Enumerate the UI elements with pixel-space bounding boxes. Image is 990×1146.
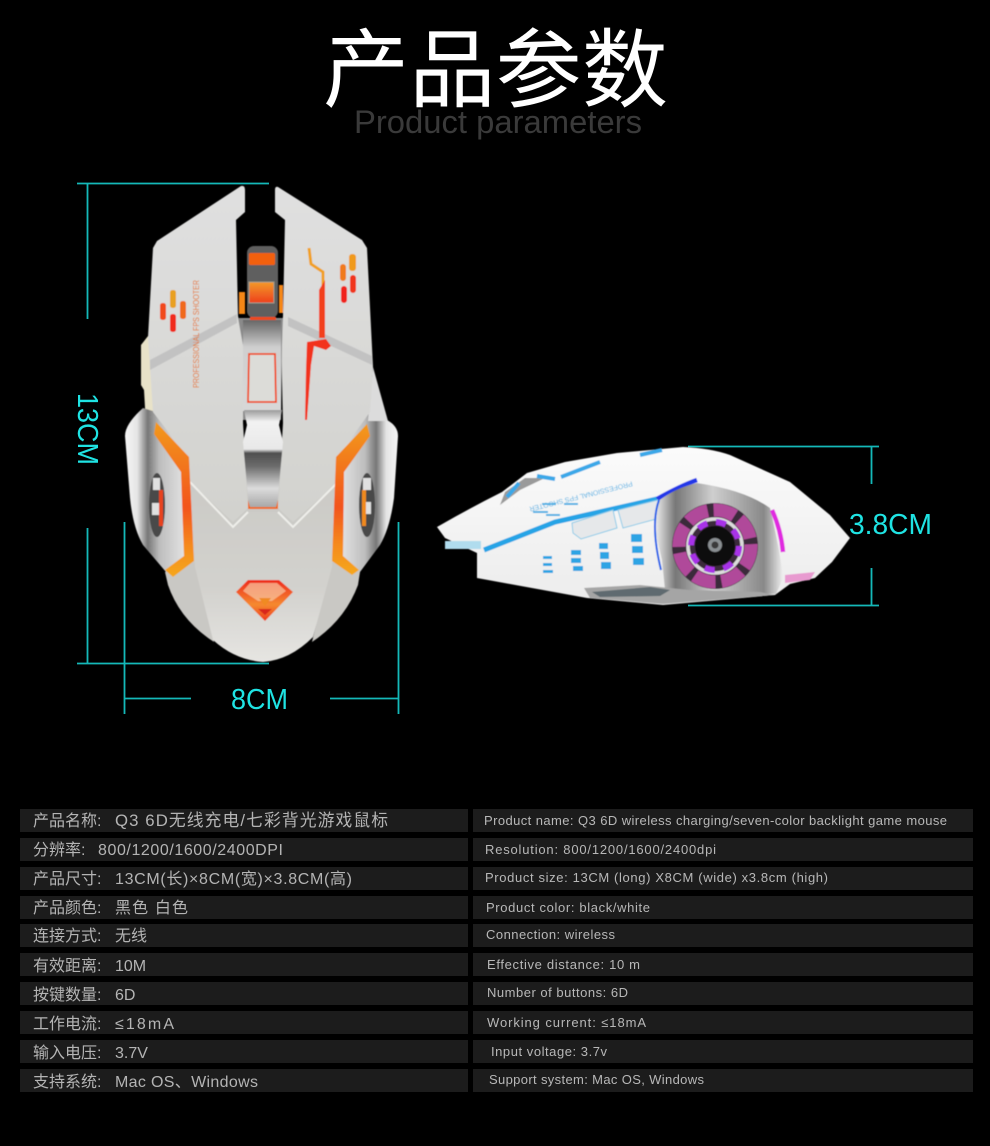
magenta glow xyxy=(772,510,783,552)
orange strip xyxy=(248,500,278,509)
blue hub edge xyxy=(655,500,661,570)
indigo glow end xyxy=(657,480,697,499)
row: buttons: 6D xyxy=(115,987,135,1004)
wheel housing xyxy=(247,246,278,318)
right side wheel xyxy=(359,473,375,537)
row: size: 13CM(长)×8CM(宽)×3.8CM(高) xyxy=(115,870,352,888)
lightning decoration xyxy=(305,248,331,420)
dimension label: 13CM: 13CM xyxy=(71,393,103,465)
product slogan text: PROFESSIONAL FPS SHOOTER xyxy=(192,280,201,388)
row: connection xyxy=(20,924,468,947)
row: resolution: Resolution: 800/1200/1600/2400dpi xyxy=(485,842,716,857)
row: voltage: 输入电压: xyxy=(33,1044,101,1062)
row: buttons: 按键数量: xyxy=(33,986,101,1004)
row: system: Support system: Mac OS, Windows xyxy=(489,1072,704,1087)
specification table: chinese column xyxy=(20,809,468,1092)
row: current: 工作电流: xyxy=(33,1015,101,1033)
left side wheel xyxy=(149,473,165,537)
rear shell right xyxy=(312,562,360,642)
dimension: 8cm width xyxy=(124,522,398,716)
grey stripe right xyxy=(288,317,372,365)
wheel highlight main xyxy=(249,282,274,303)
top view mouse xyxy=(125,186,398,662)
row: system: 支持系统: xyxy=(33,1073,101,1091)
magenta rear underglow xyxy=(785,572,815,583)
blue top lights xyxy=(507,450,662,497)
row: product name: Product name: Q3 6D wireless charging/seven-color backlight game mouse xyxy=(484,813,947,828)
left main button xyxy=(148,186,248,522)
side wheel xyxy=(672,503,758,589)
right button light marks xyxy=(340,254,356,303)
dimension: 13cm height xyxy=(71,183,269,664)
top blue print: PROFESSIONAL FPS SHOOTER xyxy=(529,479,633,512)
row: voltage xyxy=(20,1040,468,1063)
row: size xyxy=(20,867,468,890)
row: size xyxy=(473,867,973,890)
title xyxy=(323,23,668,140)
right wing shoulder xyxy=(368,367,388,421)
heading: chinese title: 产品参数 xyxy=(323,23,668,119)
row: buttons: Number of buttons: 6D xyxy=(487,985,628,1000)
row: voltage xyxy=(473,1040,973,1063)
side buttons xyxy=(572,500,660,539)
wheel highlight top xyxy=(249,253,275,265)
chrome hub xyxy=(655,483,783,594)
left button light marks xyxy=(160,290,186,332)
row: resolution xyxy=(473,838,973,861)
row: resolution: 分辨率: xyxy=(33,841,85,859)
grey stripe left xyxy=(150,314,237,370)
row: color: Product color: black/white xyxy=(486,900,650,915)
row: distance: Effective distance: 10 m xyxy=(487,957,640,972)
row: current: ≤18mA xyxy=(115,1016,174,1033)
row: system xyxy=(20,1069,468,1092)
row: current xyxy=(473,1011,973,1034)
side button xyxy=(141,336,153,425)
rear shell xyxy=(165,562,214,642)
center base xyxy=(188,440,340,578)
row: product name: 产品名称: xyxy=(33,812,101,830)
row: product name xyxy=(20,809,468,832)
row: voltage: 3.7V xyxy=(115,1045,148,1062)
palm rest xyxy=(190,482,337,662)
blue glow line xyxy=(484,499,657,550)
row: buttons xyxy=(20,982,468,1005)
left orange glow stripe xyxy=(154,422,194,577)
row: current: Working current: ≤18mA xyxy=(487,1015,646,1030)
row: color xyxy=(20,896,468,919)
tiger logo xyxy=(236,580,293,621)
chrome center strip xyxy=(243,410,283,508)
row: color xyxy=(473,896,973,919)
row: resolution: 800/1200/1600/2400DPI xyxy=(98,842,283,859)
row: current xyxy=(20,1011,468,1034)
heading: english subtitle: Product parameters xyxy=(354,104,642,140)
side view mouse xyxy=(437,447,850,605)
bottom edge detail xyxy=(584,585,775,604)
scroll wheel channel xyxy=(238,318,283,420)
side shell xyxy=(437,447,850,605)
wheel side lights xyxy=(239,285,283,320)
row: buttons xyxy=(473,982,973,1005)
row: color: 产品颜色: xyxy=(33,899,101,917)
row: product name: Q3 6D无线充电/七彩背光游戏鼠标 xyxy=(115,811,388,830)
dimension label: 3.8CM: 3.8CM xyxy=(849,509,932,541)
scroll area dark xyxy=(500,478,545,505)
row: size: Product size: 13CM (long) X8CM (wide) x3.8cm (high) xyxy=(485,870,828,885)
row: connection: Connection: wireless xyxy=(486,927,616,942)
left wing xyxy=(125,408,194,578)
dimension: 3.8cm thickness xyxy=(688,446,932,606)
dimension label: 8CM: 8CM xyxy=(231,684,288,716)
row: size: 产品尺寸: xyxy=(33,870,101,888)
dpi button xyxy=(248,354,276,402)
row: connection: 无线 xyxy=(115,927,147,945)
right wing xyxy=(332,405,398,578)
row: distance: 有效距离: xyxy=(33,957,101,975)
row: product name xyxy=(473,809,973,832)
right main button xyxy=(275,187,373,522)
row: distance xyxy=(473,953,973,976)
right orange glow stripe xyxy=(332,424,370,575)
palm crease highlight xyxy=(190,482,337,527)
blue vent lights xyxy=(543,534,644,573)
row: distance xyxy=(20,953,468,976)
row: connection xyxy=(473,924,973,947)
dpi bridge xyxy=(243,320,281,411)
row: resolution xyxy=(20,838,468,861)
row: system: Mac OS、Windows xyxy=(115,1074,258,1091)
grey tab xyxy=(445,541,481,549)
row: distance: 10M xyxy=(115,958,146,975)
row: voltage: Input voltage: 3.7v xyxy=(491,1044,608,1059)
row: system xyxy=(473,1069,973,1092)
row: color: 黑色 白色 xyxy=(115,899,188,917)
underside highlight xyxy=(592,587,670,597)
row: connection: 连接方式: xyxy=(33,927,101,945)
specification table: english column xyxy=(473,809,973,1092)
